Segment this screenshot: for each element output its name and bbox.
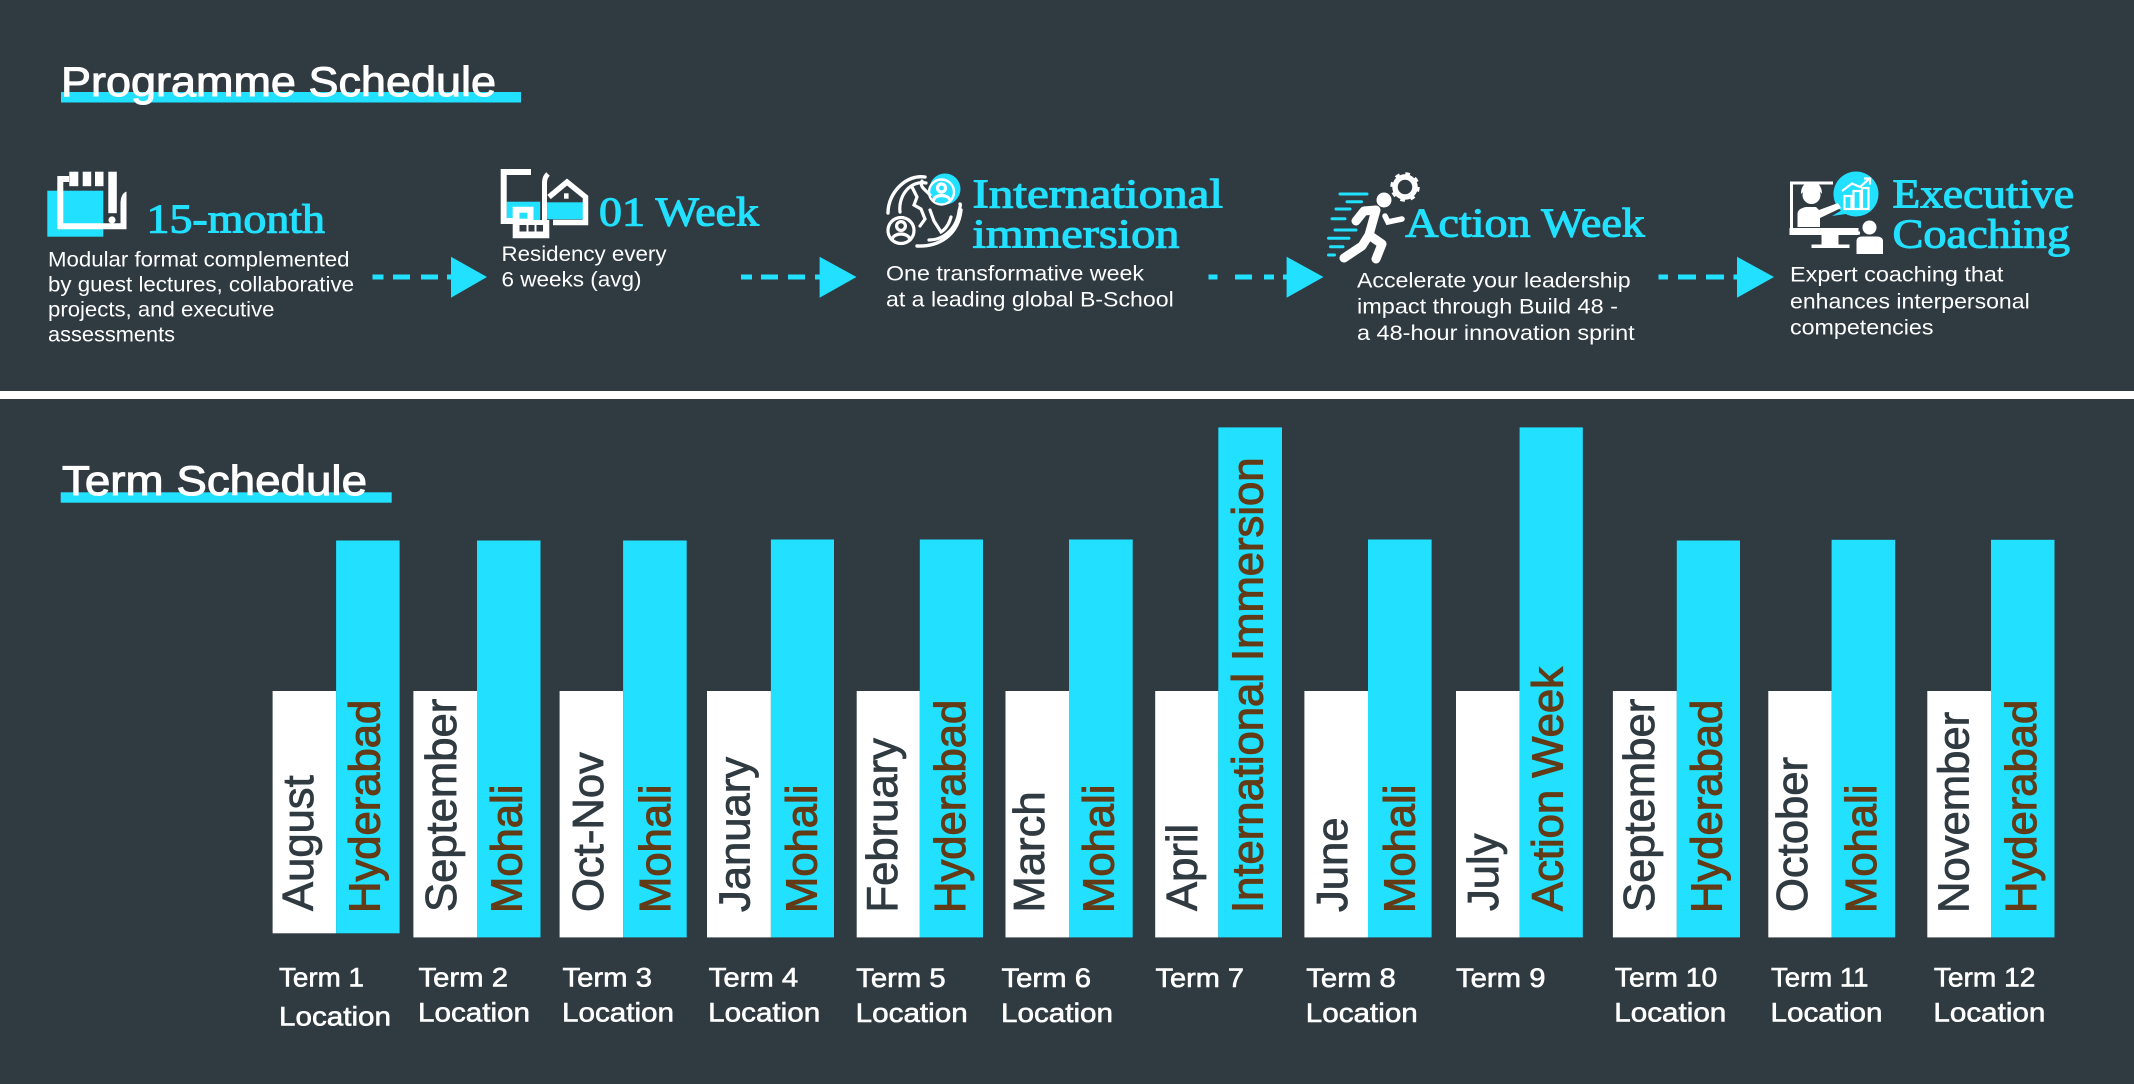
term 5 bbox=[856, 540, 983, 1028]
description: action week bbox=[1357, 270, 1635, 345]
term 10 bbox=[1613, 540, 1740, 1028]
term 1: August bbox=[275, 775, 323, 911]
term 11: Location bbox=[1770, 998, 1882, 1028]
title: executive coaching: Coaching bbox=[1892, 210, 2070, 256]
term 5: Location bbox=[856, 998, 968, 1028]
term 6: March bbox=[1006, 791, 1054, 912]
icon: running figure with gear bbox=[1328, 174, 1418, 259]
description: executive coaching bbox=[1790, 264, 2030, 339]
term 2 bbox=[413, 540, 540, 1028]
step: 01 week bbox=[502, 172, 760, 292]
term 2: Term 2 bbox=[418, 963, 508, 993]
term 12: Hyderabad bbox=[1998, 700, 2046, 913]
term 10: Location bbox=[1614, 998, 1726, 1028]
title: international immersion bbox=[972, 171, 1223, 256]
term 12: November bbox=[1931, 712, 1979, 913]
title: international immersion: immersion bbox=[972, 210, 1180, 256]
description: 15-month: by guest lectures, collaborative bbox=[48, 274, 354, 297]
term 7 bbox=[1155, 427, 1282, 993]
term 4: Term 4 bbox=[709, 963, 798, 993]
description: international immersion bbox=[886, 263, 1174, 312]
term 10: Hyderabad bbox=[1683, 700, 1731, 913]
term 7: April bbox=[1159, 824, 1207, 911]
term 1 bbox=[273, 540, 400, 1032]
term 11 bbox=[1768, 540, 1895, 1028]
title: 01 week: 01 Week bbox=[599, 189, 760, 235]
term 3: Mohali bbox=[632, 785, 680, 913]
term 12: Location bbox=[1933, 998, 2045, 1028]
term 6: Term 6 bbox=[1002, 963, 1091, 993]
term 4: January bbox=[711, 757, 759, 912]
term 3 bbox=[560, 540, 687, 1028]
term 6: Location bbox=[1001, 998, 1113, 1028]
term 4: Location bbox=[708, 998, 820, 1028]
title: executive coaching: Executive bbox=[1892, 171, 2074, 217]
description: executive coaching: enhances interpersonal bbox=[1790, 290, 2030, 313]
term 2: Mohali bbox=[484, 785, 532, 913]
arrow: step 1 to 2 bbox=[372, 257, 487, 298]
term 1: Location bbox=[279, 1002, 391, 1032]
term 11: October bbox=[1769, 757, 1817, 912]
description: international immersion: One transformative week bbox=[886, 263, 1145, 286]
term 5: Hyderabad bbox=[927, 700, 975, 913]
term 2: September bbox=[418, 699, 466, 912]
panel: term schedule bbox=[61, 427, 2055, 1032]
heading: programme schedule: Programme Schedule bbox=[61, 58, 496, 105]
term 12 bbox=[1927, 540, 2054, 1028]
title: international immersion: International bbox=[972, 171, 1223, 217]
term 4 bbox=[707, 540, 834, 1028]
arrow: step 3 to 4 bbox=[1208, 257, 1324, 298]
description: 15-month: Modular format complemented bbox=[48, 249, 350, 272]
term 3: Oct-Nov bbox=[565, 752, 613, 912]
description: 01 week: Residency every bbox=[502, 243, 667, 266]
term 9: July bbox=[1460, 833, 1508, 911]
term 9: Term 9 bbox=[1456, 963, 1546, 993]
description: 01 week: 6 weeks (avg) bbox=[502, 269, 642, 292]
heading: term schedule: Term Schedule bbox=[62, 457, 367, 504]
description: 15-month: projects, and executive bbox=[48, 299, 274, 322]
term 8: Mohali bbox=[1376, 785, 1424, 913]
term 9: Action Week bbox=[1525, 667, 1573, 911]
description: executive coaching: Expert coaching that bbox=[1790, 264, 2004, 287]
description: international immersion: at a leading global B-School bbox=[886, 289, 1174, 312]
term 3: Term 3 bbox=[562, 963, 652, 993]
panel: programme schedule bbox=[47, 58, 2074, 347]
term 1: Term 1 bbox=[279, 963, 364, 993]
term 4: Mohali bbox=[778, 785, 826, 913]
term 6: Mohali bbox=[1076, 785, 1124, 913]
term 11: Term 11 bbox=[1771, 962, 1868, 992]
description: executive coaching: competencies bbox=[1790, 316, 1934, 339]
description: 15-month: assessments bbox=[48, 324, 175, 347]
term 5: February bbox=[859, 738, 907, 912]
description: action week: Accelerate your leadership bbox=[1357, 270, 1631, 293]
term 8: Location bbox=[1306, 998, 1418, 1028]
term 10: September bbox=[1616, 699, 1664, 912]
arrow: step 2 to 3 bbox=[741, 257, 856, 298]
term 8: June bbox=[1309, 817, 1357, 912]
icon: online coach bbox=[1790, 172, 1883, 254]
term 9 bbox=[1456, 427, 1583, 993]
term 5: Term 5 bbox=[856, 963, 946, 993]
title: executive coaching bbox=[1892, 171, 2074, 256]
step: international immersion bbox=[886, 171, 1223, 312]
title: action week: Action Week bbox=[1405, 200, 1645, 246]
term 2: Location bbox=[418, 998, 530, 1028]
step: 15-month bbox=[47, 172, 354, 347]
term 7: Term 7 bbox=[1156, 963, 1244, 993]
description: action week: a 48-hour innovation sprint bbox=[1357, 322, 1635, 345]
description: 15-month bbox=[48, 249, 354, 347]
description: 01 week bbox=[502, 243, 667, 292]
term 6 bbox=[1001, 540, 1133, 1028]
icon: residency buildings bbox=[504, 172, 586, 238]
term 8: Term 8 bbox=[1306, 963, 1396, 993]
icon: modular calendar bbox=[47, 172, 126, 237]
term 7: International Immersion bbox=[1224, 457, 1272, 913]
title: 15-month: 15-month bbox=[146, 195, 325, 241]
description: action week: impact through Build 48 - bbox=[1357, 295, 1618, 318]
term 11: Mohali bbox=[1838, 785, 1886, 913]
term 10: Term 10 bbox=[1615, 962, 1717, 992]
arrow: step 4 to 5 bbox=[1658, 257, 1774, 298]
step: executive coaching bbox=[1790, 171, 2074, 339]
icon: globe with people bbox=[888, 174, 961, 246]
step: action week bbox=[1328, 174, 1645, 345]
term 1: Hyderabad bbox=[341, 700, 389, 913]
term 8 bbox=[1304, 540, 1432, 1028]
term 3: Location bbox=[562, 998, 674, 1028]
term 12: Term 12 bbox=[1934, 962, 2035, 992]
